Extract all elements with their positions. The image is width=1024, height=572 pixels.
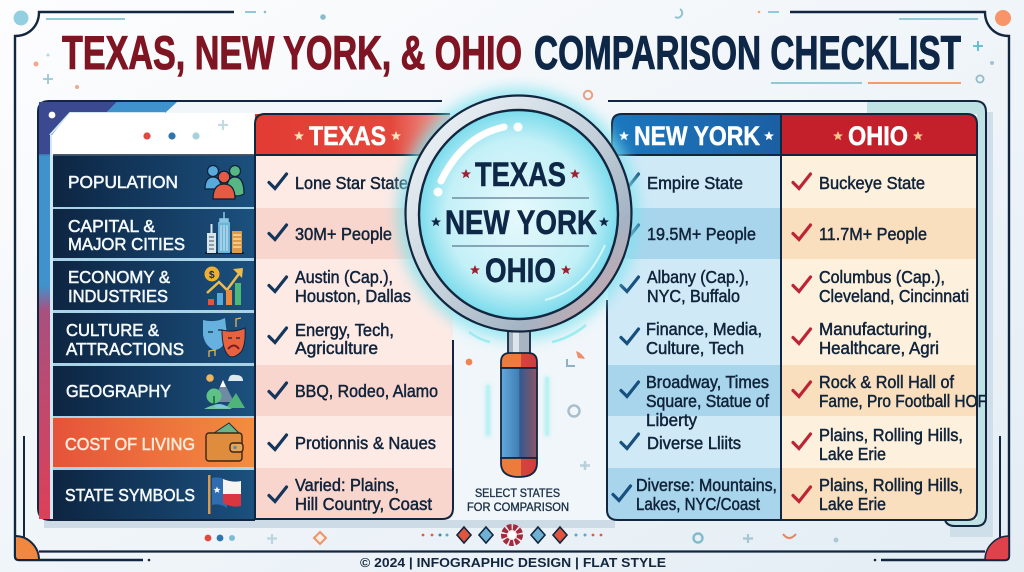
new york values: Square, Statue of: [646, 391, 769, 411]
ohio values: Buckeye State: [819, 173, 925, 193]
new york values: Albany (Cap.),: [647, 267, 749, 287]
texas values: Lone Star State: [295, 173, 408, 193]
row: culture and attractions: [53, 313, 254, 363]
panel: ohio column: [781, 114, 987, 520]
texas values: BBQ, Rodeo, Alamo: [295, 381, 438, 401]
texas values: Energy, Tech,: [295, 320, 394, 340]
texas values: Agriculture: [295, 338, 378, 358]
row: state symbols: [53, 470, 254, 519]
footer: © 2024 | INFOGRAPHIC DESIGN | FLAT STYLE: [360, 555, 666, 570]
row: population: [53, 156, 254, 207]
row: capital and major cities: MAJOR CITIES: [68, 234, 185, 254]
title: TEXAS, NEW YORK, & OHIO: [62, 26, 522, 79]
panel: category column: [39, 102, 255, 519]
ohio header: OHIO: [848, 121, 908, 151]
row: economy and industries: ECONOMY &: [68, 267, 170, 287]
row: geography: GEOGRAPHY: [66, 381, 171, 401]
row: culture and attractions: CULTURE &: [66, 320, 159, 340]
row: geography: [53, 366, 254, 416]
icon: landscape: [204, 374, 245, 409]
row: capital and major cities: CAPITAL &: [68, 216, 155, 236]
lens text: OHIO: [485, 252, 556, 290]
panel: texas column: [255, 114, 453, 520]
caption: select states: [467, 488, 569, 514]
ohio values: [819, 173, 987, 514]
row: capital and major cities: [53, 209, 254, 258]
new york header: NEW YORK: [634, 121, 760, 151]
new york values: Empire State: [647, 173, 743, 193]
texas values: 30M+ People: [295, 224, 392, 244]
new york values: Diverse: Mountains,: [636, 475, 777, 495]
new york checkmarks: [613, 174, 638, 500]
panel: new york column: [607, 114, 781, 520]
new york values: Lakes, NYC/Coast: [636, 494, 760, 514]
icon: magnifying glass: [397, 88, 639, 477]
ohio values: Cleveland, Cincinnati: [819, 286, 969, 306]
ohio values: Plains, Rolling Hills,: [819, 475, 963, 495]
row: cost of living: COST OF LIVING: [65, 434, 195, 454]
panel: table backdrop: [38, 101, 993, 537]
new york values: NYC, Buffalo: [647, 286, 740, 306]
ohio values: Fame, Pro Football HOF: [819, 391, 987, 411]
texas values: Varied: Plains,: [295, 475, 399, 495]
icon: people: [205, 166, 244, 199]
ohio values: Rock & Roll Hall of: [819, 372, 954, 392]
ohio checkmarks: [793, 174, 810, 502]
lens text: [431, 156, 609, 290]
row: culture and attractions: ATTRACTIONS: [66, 339, 184, 359]
handle: [501, 330, 537, 477]
icon: growth chart: $: [209, 270, 215, 281]
new york values: Culture, Tech: [646, 338, 744, 358]
texas values: Protionnis & Naues: [295, 433, 436, 453]
new york values: Diverse Lliits: [647, 433, 741, 453]
texas checkmarks: [269, 174, 286, 502]
ohio values: Lake Erie: [819, 494, 886, 514]
new york values: 19.5M+ People: [647, 224, 756, 244]
texas values: Houston, Dallas: [295, 286, 411, 306]
lens: [406, 96, 632, 332]
center decorations: [466, 351, 590, 470]
caption: select states: SELECT STATES: [475, 488, 560, 500]
new york values: [636, 173, 777, 514]
bottom ornament row: [205, 527, 839, 544]
ohio values: Lake Erie: [819, 444, 886, 464]
icon: texas flag: [208, 475, 241, 514]
new york values: Broadway, Times: [646, 372, 769, 392]
row: economy and industries: [53, 261, 254, 310]
texas values: Hill Country, Coast: [295, 494, 432, 514]
icon: growth chart: [204, 266, 243, 305]
row: state symbols: STATE SYMBOLS: [65, 485, 195, 505]
lens text: TEXAS: [475, 156, 566, 194]
ohio values: 11.7M+ People: [819, 224, 927, 244]
ohio values: Columbus (Cap.),: [819, 267, 945, 287]
ohio values: Plains, Rolling Hills,: [819, 425, 963, 445]
texas values: Austin (Cap.),: [295, 267, 393, 287]
row: population: POPULATION: [68, 172, 178, 192]
row: cost of living: [53, 418, 254, 467]
lens text: NEW YORK: [445, 204, 597, 242]
icon: city buildings: [205, 212, 244, 253]
texas values: [295, 173, 438, 514]
caption: select states: FOR COMPARISON: [467, 502, 569, 514]
texas header: TEXAS: [309, 121, 386, 151]
new york values: Finance, Media,: [646, 319, 762, 339]
ohio values: Healthcare, Agri: [819, 338, 939, 358]
new york values: Liberty: [646, 410, 697, 430]
icon: wallet: [206, 423, 243, 461]
icon: theatre masks: [203, 318, 245, 357]
row: economy and industries: INDUSTRIES: [68, 286, 168, 306]
ohio values: Manufacturing,: [819, 319, 932, 339]
